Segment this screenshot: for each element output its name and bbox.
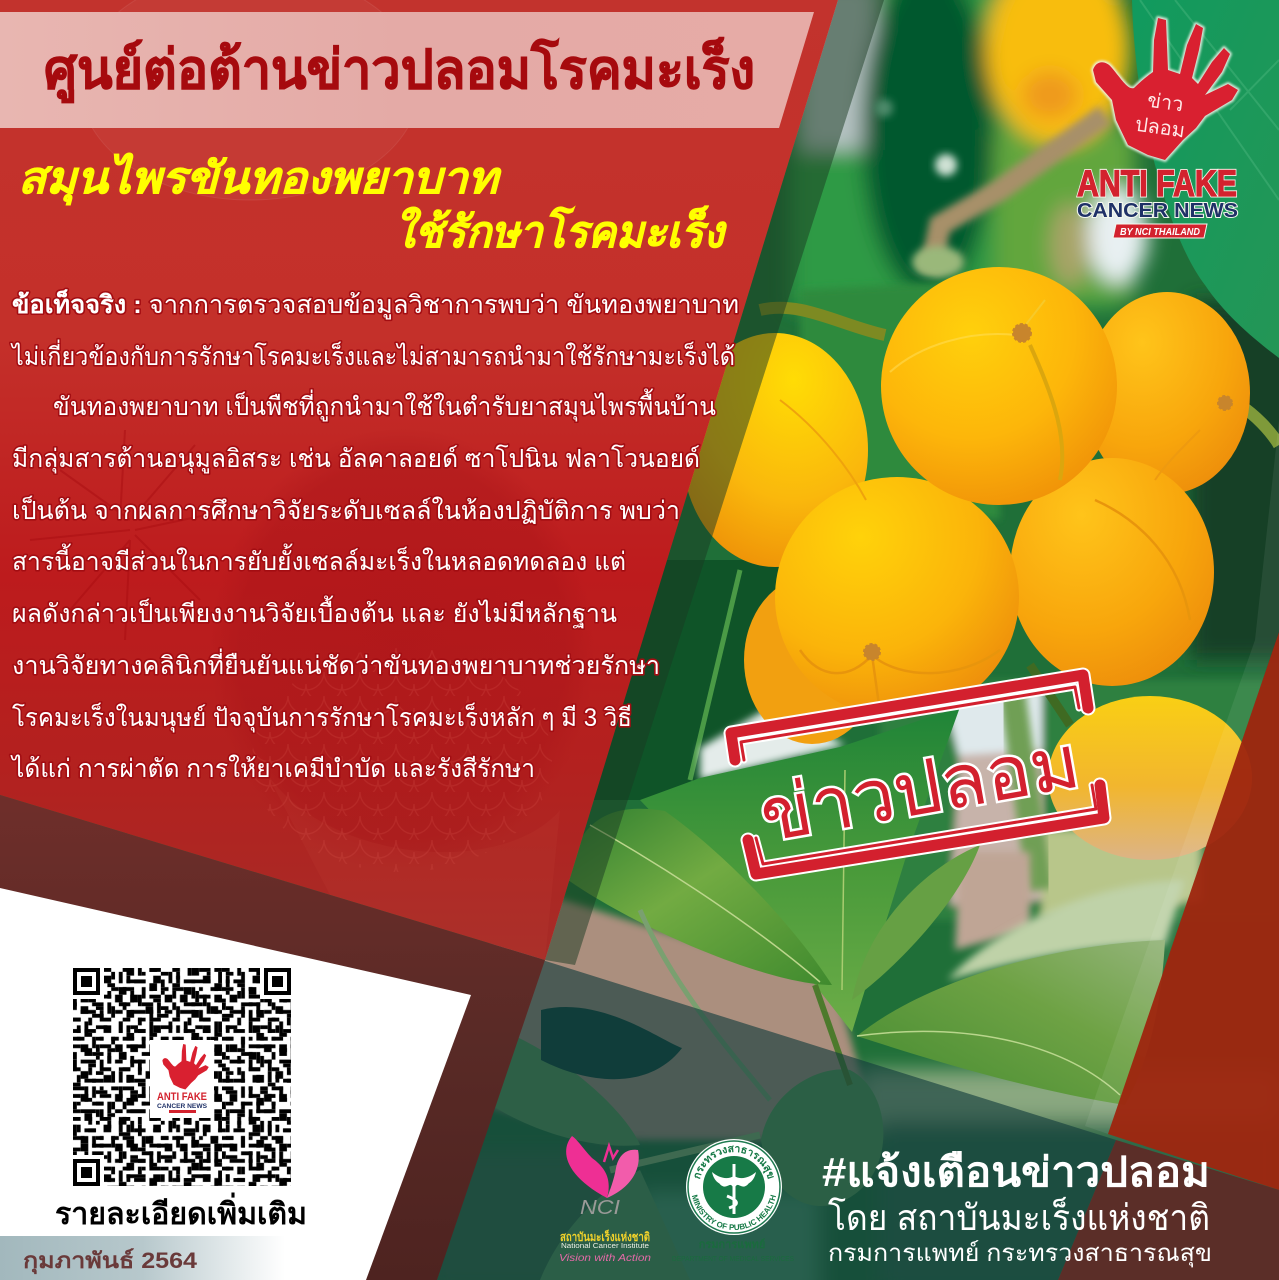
photo: stem centre: [815, 985, 850, 1085]
body text: ไม่เกี่ยวข้องกับการรักษาโรคมะเร็งและไม่สามารถนำมาใช้รักษามะเร็งได้: [10, 339, 735, 371]
body text: เป็นต้น จากผลการศึกษาวิจัยระดับเซลล์ในห้องปฏิบัติการ พบว่า: [12, 495, 680, 525]
photo: beige ground: [470, 880, 880, 1140]
logo: ministry of public health: MINISTRY OF PUBLIC HEALTH: [692, 1194, 776, 1230]
logo: national cancer institute: NCI: [580, 1197, 621, 1219]
photo: narrow leaf: [852, 845, 980, 1000]
translucent strip: left of fruit: [545, 0, 884, 965]
logo badge: by nci thailand: BY NCI THAILAND: [1120, 227, 1200, 238]
overlay: red right stripe: [1108, 632, 1279, 1190]
photo: green area left of main fruit: [800, 280, 1000, 520]
stamp: fake news: [731, 675, 1104, 874]
overlay: dark teal bottom band: [437, 958, 1116, 1280]
QR centre logo: CANCER NEWS: [157, 1104, 207, 1110]
body text: ผลดังกล่าวเป็นเพียงงานวิจัยเบื้องต้น และ ยังไม่มีหลักฐาน: [12, 595, 617, 628]
panel: white QR area: [0, 888, 471, 1280]
photo: lower leaves: [761, 1069, 883, 1206]
logo: ministry of public health: DEPARTMENT OF MEDICAL SERVICES: [672, 1256, 794, 1263]
icon: red hand: ข่าว: [1146, 90, 1185, 116]
logo: national cancer institute: Vision with Action: [559, 1253, 652, 1264]
body text: ขันทองพยาบาท เป็นพืชที่ถูกนำมาใช้ในตำรับยาสมุนไพรพื้นบ้าน: [53, 388, 716, 422]
logo: ministry of public health: กรมการแพทย์: [699, 1238, 765, 1251]
photo: lower mid background: [700, 680, 1279, 920]
fruit calyxes: [864, 324, 1232, 660]
title: ศูนย์ต่อต้านข่าวปลอมโรคมะเร็ง: [44, 38, 755, 103]
footer heading: โดย สถาบันมะเร็งแห่งชาติ: [828, 1195, 1210, 1238]
photo: big leaf top right: [1132, 0, 1279, 358]
panel texture: scaly cancer cell: [210, 428, 594, 960]
overlay: brown bottom right: [1058, 1140, 1279, 1280]
photo: blurred branch: [930, 115, 1105, 272]
body text: ข้อเท็จจริง : จากการตรวจสอบข้อมูลวิชาการพบว่า ขันทองพยาบาท: [12, 289, 739, 320]
body text: สารนี้อาจมีส่วนในการยับยั้งเซลล์มะเร็งในหลอดทดลอง แต่: [12, 543, 626, 576]
QR caption: รายละเอียดเพิ่มเติม: [55, 1192, 307, 1231]
photo: right stem: [1240, 405, 1279, 445]
icon: red hand: ปลอม: [1134, 114, 1186, 142]
QR centre logo: ANTI FAKE: [157, 1091, 207, 1103]
logo: national cancer institute: สถาบันมะเร็งแห่งชาติ: [560, 1229, 650, 1244]
body text: งานวิจัยทางคลินิกที่ยืนยันแน่ชัดว่าขันทองพยาบาทช่วยรักษา: [12, 648, 660, 680]
photo: leaf upper left: [568, 809, 832, 985]
photo: orange fruit cluster: [682, 267, 1252, 860]
date strip: กุมภาพันธ์ 2564: [23, 1248, 198, 1275]
stamp: fake news: ข่าวปลอม: [754, 720, 1085, 857]
photo: stem to left fruit: [760, 308, 885, 335]
photo: thin stalk: [690, 570, 740, 780]
footer heading: [822, 1149, 1212, 1268]
logo: ministry of public health: [672, 1139, 794, 1263]
panel: brown lower band: [0, 795, 545, 1280]
fruit creases: [780, 300, 1200, 712]
body text: [10, 289, 739, 783]
icon: red hand: [1093, 18, 1238, 160]
subtitle: [18, 152, 727, 257]
body text: โรคมะเร็งในมนุษย์ ปัจจุบันการรักษาโรคมะเร็งหลัก ๆ มี 3 วิธี: [12, 702, 632, 733]
logo: ministry of public health: กระทรวงสาธารณสุข: [694, 1146, 774, 1179]
photo: pale blurred leaf: [948, 880, 1185, 980]
panel: red background: [0, 0, 838, 960]
translucent strip: light right band: [1085, 420, 1279, 1134]
subtitle: สมุนไพรขันทองพยาบาท: [18, 152, 502, 206]
photo: dark lower left shadow: [560, 560, 800, 800]
logo text: anti fake: ANTI FAKE: [1077, 163, 1237, 204]
banner: title background: [0, 12, 814, 128]
body text: มีกลุ่มสารต้านอนุมูลอิสระ เช่น อัลคาลอยด์ ซาโปนิน ฟลาโวนอยด์: [12, 444, 700, 474]
QR centre logo: [150, 1040, 214, 1118]
logo text: anti fake: ANTI FAKE: [1077, 163, 1237, 204]
photo: blurred top background: [790, 0, 1279, 660]
QR finder patterns: [71, 966, 293, 1188]
panel texture: blood cell: [80, 0, 420, 200]
footer heading: กรมการแพทย์ กระทรวงสาธารณสุข: [828, 1239, 1212, 1268]
QR code: [71, 966, 293, 1188]
body text: ได้แก่ การผ่าตัด การให้ยาเคมีบำบัด และรังสีรักษา: [10, 754, 535, 783]
footer heading: #แจ้งเตือนข่าวปลอม: [822, 1149, 1210, 1195]
photo: pale green stalk: [1012, 690, 1040, 890]
panel texture: spiked virus: [30, 430, 230, 640]
photo: right leaf: [857, 940, 1165, 1105]
logo: national cancer institute: [559, 1136, 652, 1264]
date strip: [0, 1236, 285, 1280]
subtitle: ใช้รักษาโรคมะเร็ง: [394, 205, 727, 257]
logo: anti fake cancer news: [1077, 18, 1238, 238]
photo: lower blurred leaves: [430, 1070, 1279, 1280]
logo text: cancer news: CANCER NEWS: [1077, 200, 1238, 222]
logo: national cancer institute: National Cancer Institute: [561, 1243, 649, 1250]
photo: centre leaf: [640, 707, 960, 1032]
